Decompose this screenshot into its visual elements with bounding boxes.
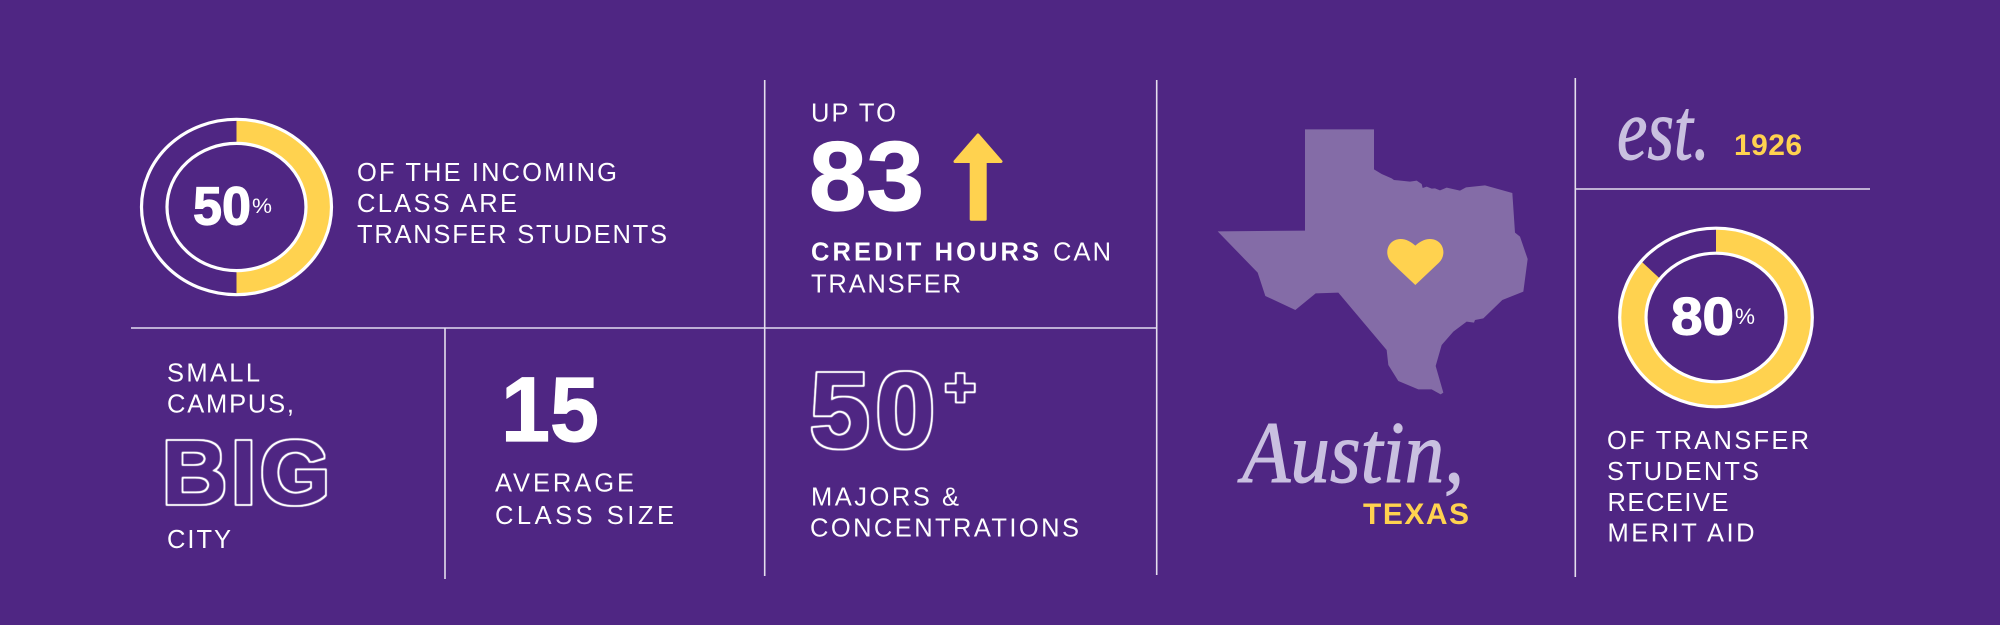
map: Texas	[1218, 129, 1528, 394]
description: average class size: AVERAGE	[495, 470, 634, 498]
text: small campus	[167, 360, 294, 418]
text: up to: UP TO	[811, 100, 896, 128]
panel: 80 percent merit aid	[1607, 228, 1812, 548]
script text: est.: est.	[1617, 82, 1710, 179]
outlined number: 50 plus: +	[945, 359, 975, 417]
description: merit aid: RECEIVE	[1608, 489, 1728, 517]
description: average class size	[495, 470, 674, 530]
text: city: CITY	[167, 526, 231, 554]
description: credit hours can transfer: TRANSFER	[811, 271, 961, 299]
description: credit hours can transfer: CREDIT HOURS	[811, 239, 1039, 267]
text: small campus: SMALL	[167, 360, 260, 388]
description: incoming class: CLASS ARE	[357, 190, 517, 218]
text: 1926: 1926	[1734, 129, 1802, 162]
panel: credit hours	[809, 100, 1111, 299]
description: merit aid: MERIT AID	[1608, 520, 1754, 548]
donut chart: 50 percent: %	[252, 195, 272, 218]
text: small campus: CAMPUS,	[167, 390, 294, 418]
description: majors and concentrations: CONCENTRATIONS	[810, 515, 1079, 543]
description: incoming class	[357, 159, 667, 249]
description: credit hours can transfer: CAN	[1053, 239, 1111, 267]
donut chart: 80 percent: 80	[1671, 288, 1734, 346]
number: 15: 15	[501, 359, 599, 461]
description: incoming class: TRANSFER STUDENTS	[357, 221, 667, 249]
description: majors and concentrations	[810, 484, 1079, 543]
description: merit aid: OF TRANSFER	[1607, 427, 1809, 455]
icon: up arrow	[955, 135, 1001, 219]
text: Texas: TEXAS	[1363, 498, 1469, 531]
panel: average class size	[495, 359, 674, 530]
outlined number: 50 plus: 50	[810, 350, 935, 470]
description: incoming class: OF THE INCOMING	[357, 159, 617, 187]
donut chart: 50 percent	[142, 119, 332, 295]
panel: established	[1617, 82, 1802, 179]
description: majors and concentrations: MAJORS &	[811, 484, 959, 512]
panel: location	[1218, 129, 1528, 531]
script text: Austin: Austin,	[1238, 405, 1464, 502]
description: average class size: CLASS SIZE	[495, 502, 674, 530]
outlined word: BIG: BIG	[162, 423, 330, 523]
number: 83: 83	[809, 121, 924, 231]
description: merit aid: STUDENTS	[1607, 458, 1759, 486]
panel: majors and concentrations	[810, 350, 1079, 543]
description: merit aid	[1607, 427, 1809, 548]
donut chart: 80 percent: %	[1735, 304, 1755, 329]
icon: heart	[1387, 239, 1443, 285]
panel: small campus big city	[162, 360, 330, 554]
donut chart: 80 percent	[1620, 228, 1812, 407]
panel: 50 percent transfer students	[142, 119, 667, 295]
donut chart: 50 percent: 50	[193, 176, 251, 236]
description: credit hours can transfer	[811, 239, 1111, 299]
